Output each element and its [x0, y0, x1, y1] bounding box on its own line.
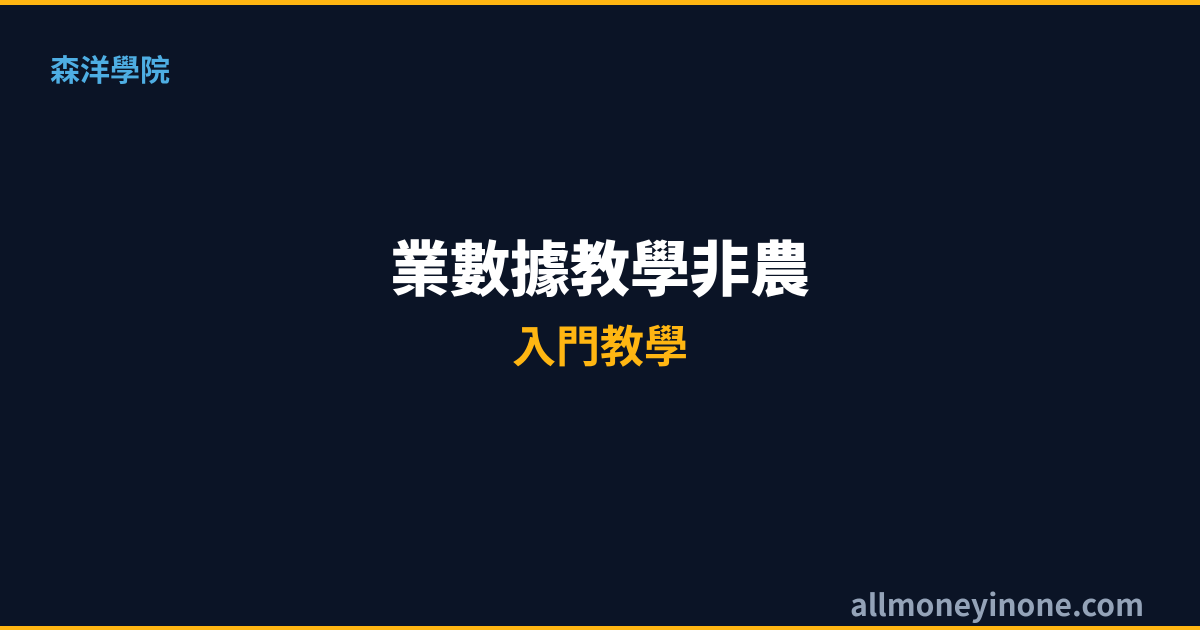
- bottom accent bar: [0, 626, 1200, 630]
- brand name: 森洋學院: [50, 46, 170, 90]
- subtitle: 入門教學: [512, 311, 688, 375]
- top accent bar: [0, 0, 1200, 5]
- website url: allmoneyinone.com: [850, 581, 1144, 625]
- title: 業數據教學非農: [390, 222, 810, 309]
